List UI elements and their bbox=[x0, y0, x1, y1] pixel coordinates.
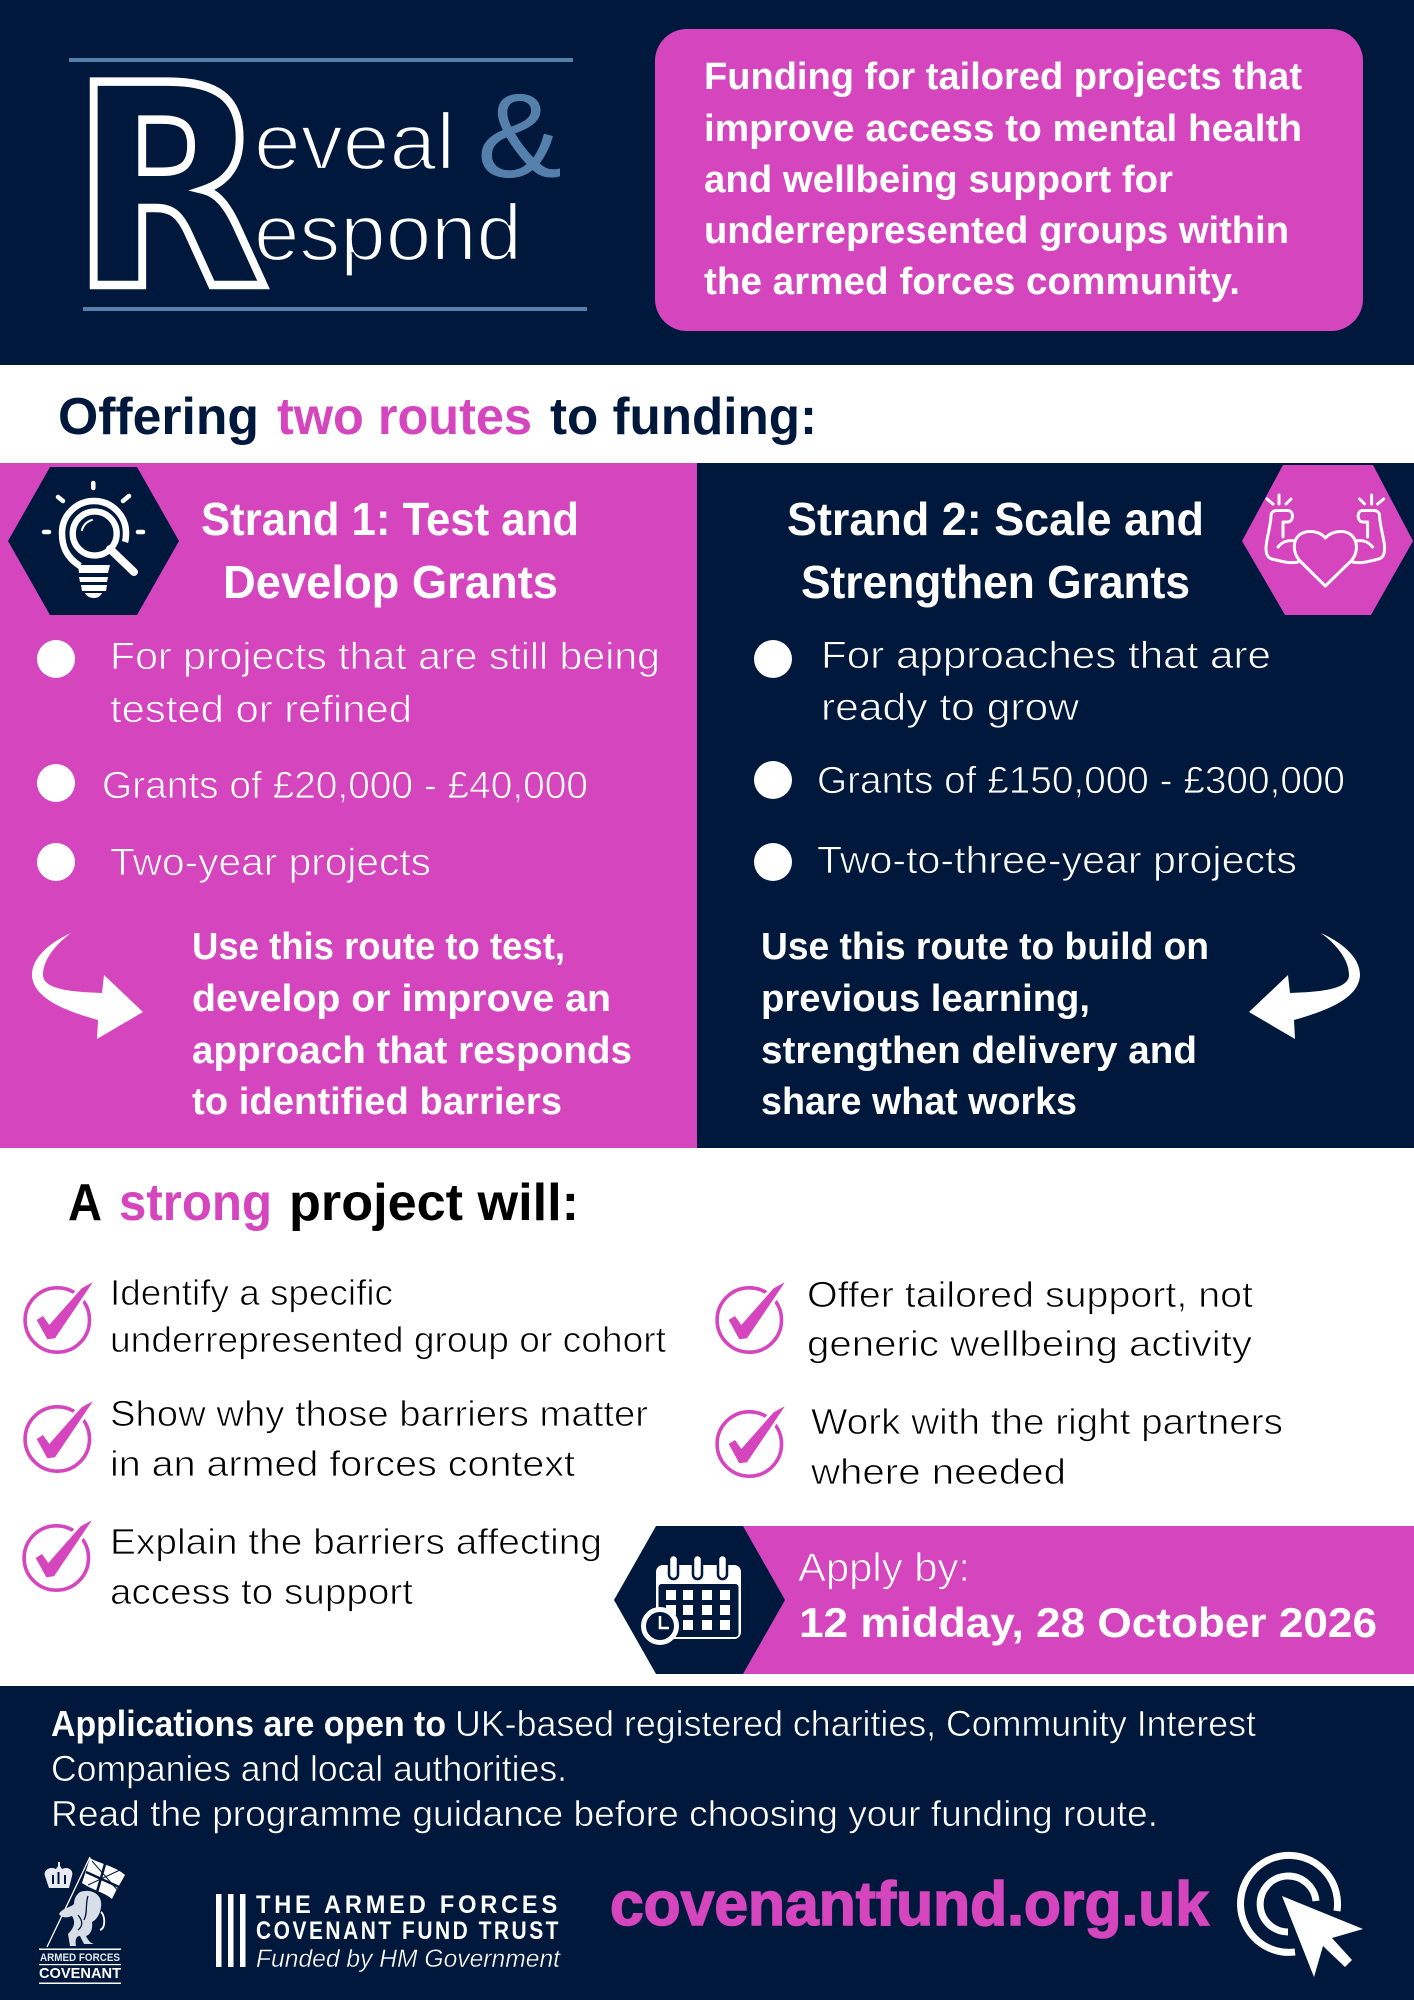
eligibility text: Read the programme guidance before choosing your funding route. bbox=[51, 1793, 1158, 1834]
strand 2 bullets: Grants of £150,000 - £300,000 bbox=[817, 760, 1345, 802]
strand 1 bullets bbox=[37, 636, 660, 884]
check item: explain barriers bbox=[24, 1520, 602, 1612]
check item: tailored support: generic wellbeing activity bbox=[807, 1323, 1252, 1364]
strand 1 bullets: For projects that are still being bbox=[110, 636, 660, 678]
strand 1 route text: to identified barriers bbox=[192, 1081, 562, 1123]
strand 1 heading: Develop Grants bbox=[223, 556, 558, 608]
strand 1 route text: Use this route to test, bbox=[192, 926, 565, 968]
check item: right partners bbox=[717, 1401, 1283, 1492]
strand 2 bullets: ready to grow bbox=[821, 687, 1080, 729]
logo: Reveal & Respond: eveal bbox=[254, 97, 455, 186]
logo: armed forces covenant fund trust: COVENANT FUND TRUST bbox=[256, 1917, 561, 1945]
intro callout bbox=[655, 29, 1363, 331]
check item: tailored support bbox=[717, 1274, 1253, 1364]
strand 2 route text bbox=[761, 926, 1209, 1123]
website url: covenantfund.org.uk bbox=[610, 1870, 1209, 1939]
strand 1 route text bbox=[192, 926, 632, 1123]
heading: two routes bbox=[58, 388, 817, 446]
heading: two routes: to funding: bbox=[550, 388, 817, 446]
strand 1 bullets: Two-year projects bbox=[110, 842, 431, 884]
check item: tailored support: Offer tailored support, not bbox=[807, 1274, 1253, 1315]
icon: calendar and clock bbox=[614, 1526, 785, 1674]
check item: right partners: where needed bbox=[810, 1451, 1066, 1492]
strand 2 bullets: Two-to-three-year projects bbox=[817, 840, 1297, 882]
strand 2 heading bbox=[787, 493, 1204, 608]
strand 1 route text: approach that responds bbox=[192, 1030, 632, 1072]
check item: right partners: Work with the right partners bbox=[811, 1401, 1283, 1442]
logo: armed forces covenant: ARMED FORCES bbox=[40, 1952, 120, 1964]
logo: Reveal & Respond: & bbox=[477, 69, 562, 203]
deadline banner bbox=[614, 1526, 1414, 1674]
check item: specific group: Identify a specific bbox=[110, 1272, 393, 1313]
header band bbox=[0, 0, 1414, 365]
strand 1 bullets: tested or refined bbox=[110, 689, 412, 731]
heading: a strong project will: A bbox=[68, 1174, 102, 1232]
check item: explain barriers: access to support bbox=[110, 1571, 413, 1612]
logo: armed forces covenant fund trust: Funded by HM Government bbox=[256, 1945, 561, 1973]
logo: Reveal & Respond: R bbox=[70, 28, 269, 351]
strand 2 route text: share what works bbox=[761, 1081, 1077, 1123]
intro callout: improve access to mental health bbox=[704, 108, 1302, 150]
eligibility text bbox=[51, 1703, 1256, 1834]
intro callout: Funding for tailored projects that bbox=[704, 56, 1302, 98]
strand 2 heading: Strengthen Grants bbox=[801, 556, 1190, 608]
arrow: strand 1 bbox=[32, 933, 143, 1039]
icon: flexed arms with heart bbox=[1242, 465, 1413, 615]
checklist: strong project criteria bbox=[24, 1272, 1283, 1612]
intro callout: underrepresented groups within bbox=[704, 210, 1289, 252]
check item: why barriers matter: in an armed forces context bbox=[110, 1443, 575, 1484]
strand 2 route text: previous learning, bbox=[761, 978, 1090, 1020]
eligibility text: Companies and local authorities. bbox=[51, 1748, 567, 1789]
heading: two routes: Offering bbox=[58, 388, 259, 446]
deadline text: 12 midday, 28 October 2026 bbox=[799, 1599, 1377, 1646]
check item: why barriers matter: Show why those barriers matter bbox=[110, 1393, 648, 1434]
union flag bbox=[82, 1858, 125, 1899]
strand 1 heading: Strand 1: Test and bbox=[201, 493, 579, 545]
check item: specific group: underrepresented group or cohort bbox=[110, 1319, 666, 1360]
intro callout: and wellbeing support for bbox=[704, 159, 1173, 201]
strand 1 route text: develop or improve an bbox=[192, 978, 611, 1020]
logo: armed forces covenant fund trust bbox=[216, 1891, 561, 1973]
deadline text bbox=[798, 1546, 1377, 1646]
strand 1 bullets: Grants of £20,000 - £40,000 bbox=[102, 765, 588, 807]
strand 2 bullets bbox=[754, 635, 1345, 882]
heading: two routes: two routes bbox=[277, 388, 532, 446]
footer panel bbox=[0, 1686, 1414, 2000]
logo: armed forces covenant fund trust: THE ARMED FORCES bbox=[256, 1891, 561, 1919]
icon: lightbulb with magnifier bbox=[8, 467, 179, 615]
check item: explain barriers: Explain the barriers affecting bbox=[110, 1521, 602, 1562]
strand 2 heading: Strand 2: Scale and bbox=[787, 493, 1204, 545]
panel: strand 1 bbox=[0, 463, 697, 1148]
logo: Reveal & Respond bbox=[69, 28, 587, 351]
logo: Reveal & Respond: espond bbox=[254, 188, 522, 277]
heading: a strong project will: project will: bbox=[289, 1174, 579, 1232]
arrow: strand 2 bbox=[1249, 933, 1360, 1039]
logo: armed forces covenant: COVENANT bbox=[39, 1965, 121, 1982]
eligibility text: Applications are open to bbox=[51, 1703, 446, 1744]
strand 2 route text: strengthen delivery and bbox=[761, 1030, 1197, 1072]
deadline text: Apply by: bbox=[798, 1546, 970, 1590]
heading: a strong project will: strong bbox=[119, 1174, 272, 1232]
heading: a strong project will bbox=[68, 1174, 579, 1232]
icon: click cursor bbox=[1241, 1855, 1363, 1977]
lion bbox=[59, 1891, 104, 1946]
check item: why barriers matter bbox=[25, 1393, 648, 1484]
strand 2 bullets: For approaches that are bbox=[821, 635, 1271, 677]
crown bbox=[45, 1862, 72, 1888]
strand 2 route text: Use this route to build on bbox=[761, 926, 1209, 968]
panel: strand 2 bbox=[697, 463, 1414, 1148]
logo: armed forces covenant bbox=[39, 1857, 125, 1984]
intro callout: the armed forces community. bbox=[704, 261, 1240, 303]
check item: specific group bbox=[25, 1272, 666, 1360]
eligibility text: UK-based registered charities, Community Interest bbox=[455, 1703, 1256, 1744]
strand 1 heading bbox=[201, 493, 579, 608]
